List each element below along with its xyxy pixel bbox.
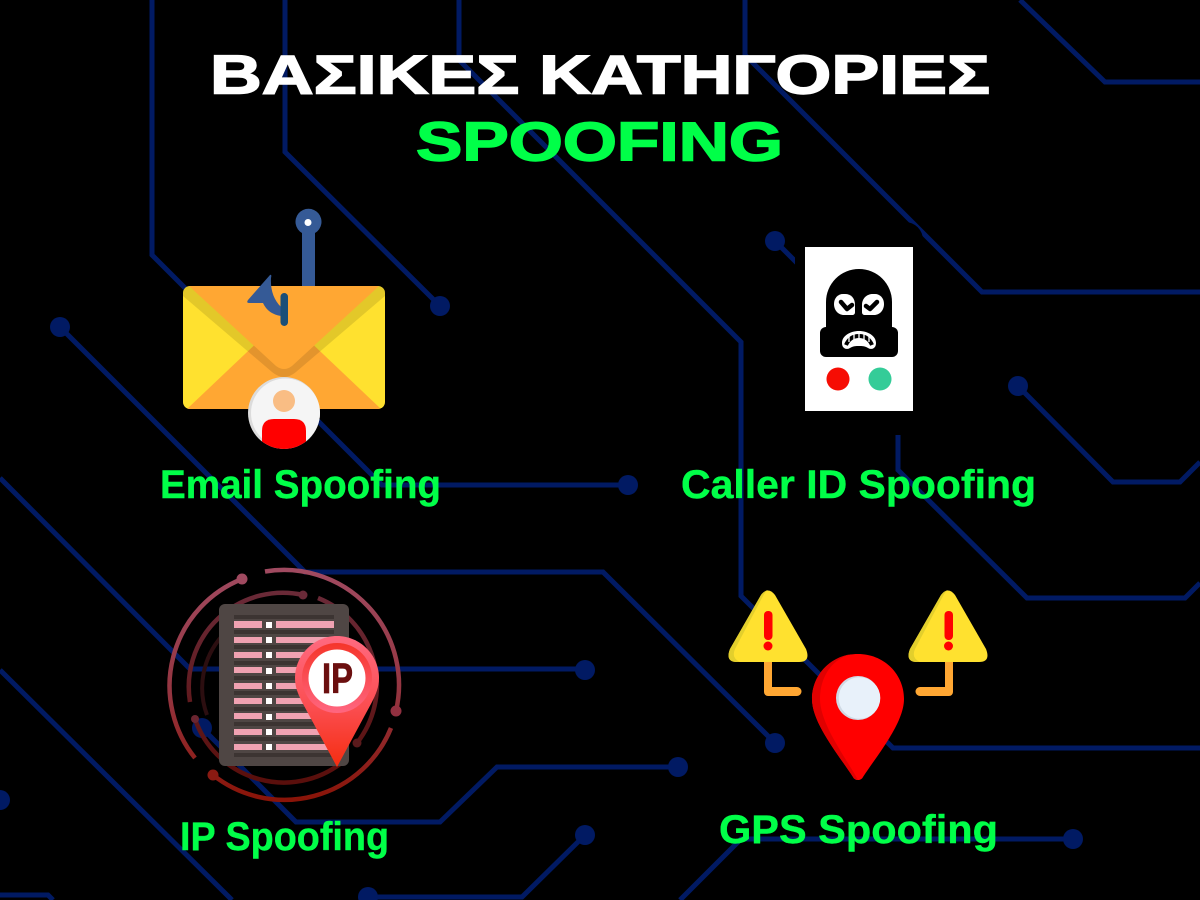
title: SPOOFING xyxy=(416,110,783,172)
icon: GPS pin with warnings xyxy=(729,590,987,780)
icon: masked caller on phone xyxy=(795,222,923,435)
label: Email Spoofing: Email Spoofing xyxy=(160,463,441,507)
title xyxy=(210,44,990,172)
label: IP Spoofing: IP Spoofing xyxy=(180,815,389,859)
icon: IP server with location pin xyxy=(170,570,402,800)
title: ΒΑΣΙΚΕΣ ΚΑΤΗΓΟΡΙΕΣ xyxy=(210,44,990,106)
server rows xyxy=(234,615,334,757)
icon: email phishing hook xyxy=(183,209,385,452)
label: Caller ID Spoofing: Caller ID Spoofing xyxy=(681,463,1036,507)
icon: IP server with location pin: IP xyxy=(322,655,353,703)
label: GPS Spoofing: GPS Spoofing xyxy=(719,808,998,852)
